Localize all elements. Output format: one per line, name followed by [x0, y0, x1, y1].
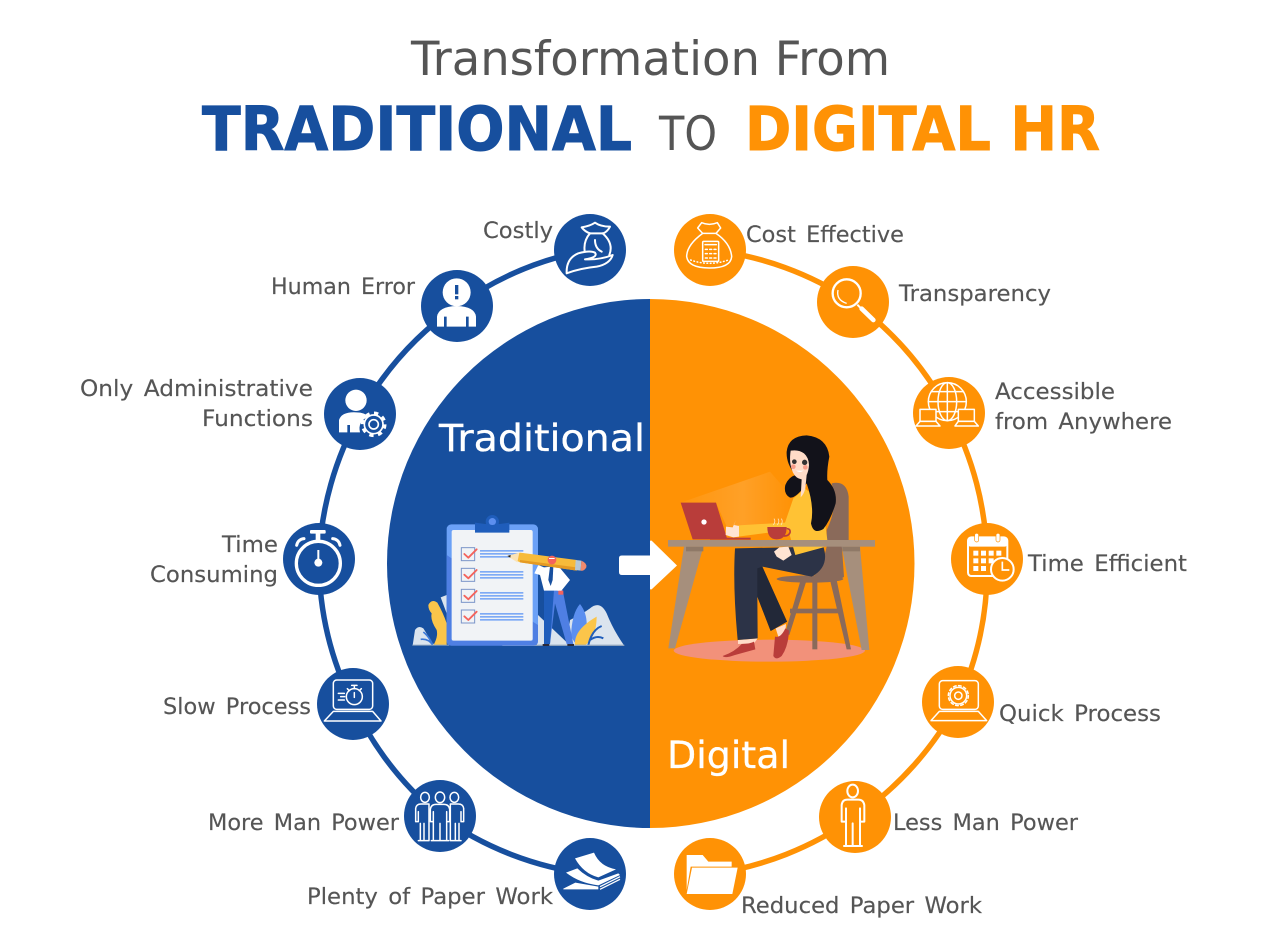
icon: stopwatch	[283, 523, 355, 595]
label: reduced paper work: Reduced Paper Work	[741, 894, 982, 919]
central circle: traditional half	[387, 299, 650, 828]
label: costly: Costly	[483, 219, 553, 244]
heading: traditional: Traditional	[438, 417, 645, 460]
label: accessible from anywhere: from Anywhere	[995, 410, 1172, 435]
label: quick process: Quick Process	[999, 702, 1161, 727]
icon: slow process laptop	[317, 668, 389, 740]
label: slow process: Slow Process	[163, 695, 311, 720]
icon: human error	[421, 270, 493, 342]
title word: digital hr: DIGITAL HR	[745, 94, 1100, 165]
ring: traditional side	[319, 250, 590, 874]
illustration: woman at laptop	[668, 435, 875, 662]
icon: globe with laptops	[913, 377, 985, 449]
node group: traditional items	[80, 214, 626, 910]
label: only administrative functions	[80, 377, 313, 432]
icon: administrative person with gear	[324, 378, 396, 450]
title word: traditional: TRADITIONAL	[202, 94, 632, 165]
label: less man power: Less Man Power	[893, 811, 1079, 836]
label: time consuming: Time	[221, 533, 278, 558]
icon: quick process laptop with gear	[922, 666, 994, 738]
label: accessible from anywhere	[995, 380, 1172, 435]
icon: costly money bag in hand	[554, 214, 626, 286]
label: only administrative functions: Only Administrative	[80, 377, 313, 402]
central circle: digital half	[650, 299, 915, 828]
icon: calendar with clock	[951, 523, 1023, 595]
label: time consuming	[150, 533, 278, 588]
heading: digital: Digital	[667, 734, 790, 777]
icon: stack of paper	[554, 838, 626, 910]
label: cost effective: Cost Effective	[746, 223, 904, 248]
icon: more man power	[404, 780, 476, 852]
arrow	[619, 540, 677, 590]
label: only administrative functions: Functions	[202, 407, 313, 432]
illustration: clipboard with man and pencil	[412, 515, 624, 646]
icon: less man power	[819, 781, 891, 853]
title word: to: TO	[658, 107, 717, 162]
icon: money bag with calculator	[674, 214, 746, 286]
title	[202, 32, 1100, 165]
node group: digital items	[674, 214, 1187, 919]
label: plenty of paper work: Plenty of Paper Work	[307, 885, 553, 910]
label: time efficient: Time Efficient	[1027, 552, 1187, 577]
ring: digital side	[710, 250, 987, 874]
label: accessible from anywhere: Accessible	[995, 380, 1115, 405]
label: human error: Human Error	[271, 275, 416, 300]
label: more man power: More Man Power	[208, 811, 400, 836]
icon: magnifier	[817, 266, 889, 338]
icon: folder	[674, 838, 746, 910]
label: time consuming: Consuming	[150, 563, 278, 588]
label: transparency: Transparency	[898, 282, 1051, 307]
title line one: Transformation From	[410, 32, 890, 87]
